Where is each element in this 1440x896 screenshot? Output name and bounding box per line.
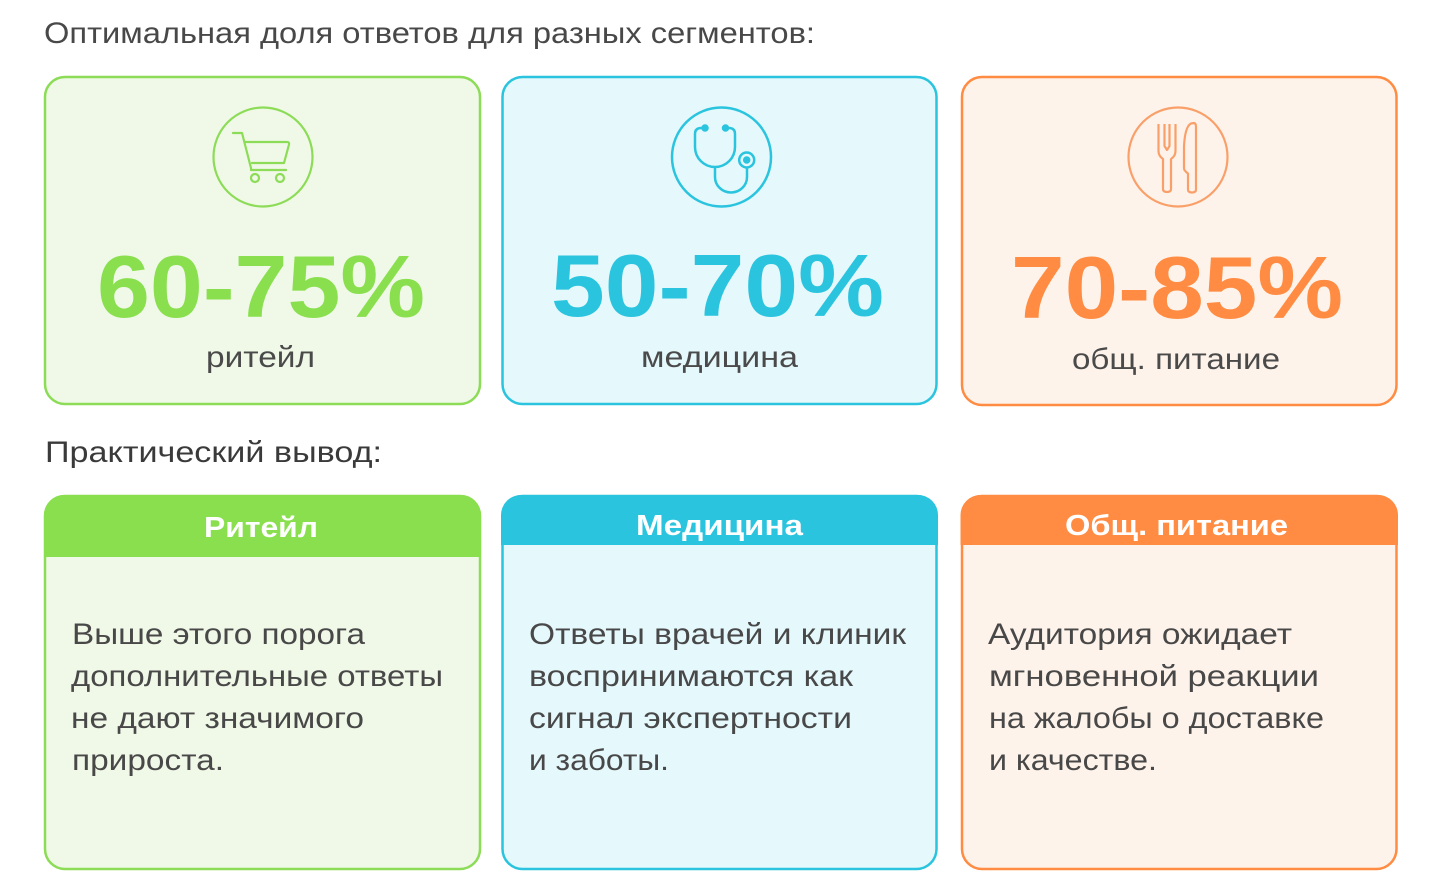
body text: food service: и качестве. [989, 744, 1157, 777]
header title: food service: Общ. питание [1065, 510, 1288, 542]
label: retail: ритейл [206, 341, 315, 374]
heading: optimal share: Оптимальная доля ответов для разных сегментов: [44, 17, 815, 50]
body text: food service [988, 618, 1324, 777]
body text: medicine: сигнал экспертности [529, 702, 852, 735]
body text: medicine: и заботы. [529, 744, 669, 777]
panel: retail stat [45, 77, 480, 404]
body text: retail: прироста. [72, 744, 224, 777]
header: retail [44, 495, 481, 557]
heading: practical takeaway: Практический вывод: [45, 436, 382, 469]
panel: food service stat [962, 77, 1396, 405]
icon: fork and knife [1128, 108, 1228, 206]
panel: medicine stat [502, 77, 936, 404]
stat: 50-70%: 50-70% [551, 236, 884, 335]
body text: medicine [529, 618, 907, 777]
panel: food service takeaway [960, 495, 1398, 869]
body text: medicine: воспринимаются как [529, 660, 854, 693]
icon: shopping cart [214, 108, 312, 206]
body text: retail: дополнительные ответы [71, 660, 443, 693]
body text: food service: на жалобы о доставке [989, 702, 1324, 735]
stat: 60-75%: 60-75% [97, 237, 425, 336]
label: medicine: медицина [641, 341, 798, 374]
body text: retail: не дают значимого [71, 702, 364, 735]
stat: 70-85%: 70-85% [1011, 238, 1343, 337]
panel: retail takeaway [44, 495, 481, 869]
header title: medicine: Медицина [636, 510, 804, 542]
body text: food service: мгновенной реакции [989, 660, 1319, 693]
body text: food service: Аудитория ожидает [988, 618, 1292, 651]
body text: retail [71, 618, 443, 777]
icon: stethoscope [672, 108, 771, 206]
panel: medicine takeaway [501, 495, 938, 869]
label: food service: общ. питание [1072, 343, 1280, 376]
body text: retail: Выше этого порога [72, 618, 365, 651]
body text: medicine: Ответы врачей и клиник [529, 618, 907, 651]
header: food service [960, 495, 1398, 545]
header: medicine [501, 495, 938, 545]
header title: retail: Ритейл [204, 512, 318, 544]
